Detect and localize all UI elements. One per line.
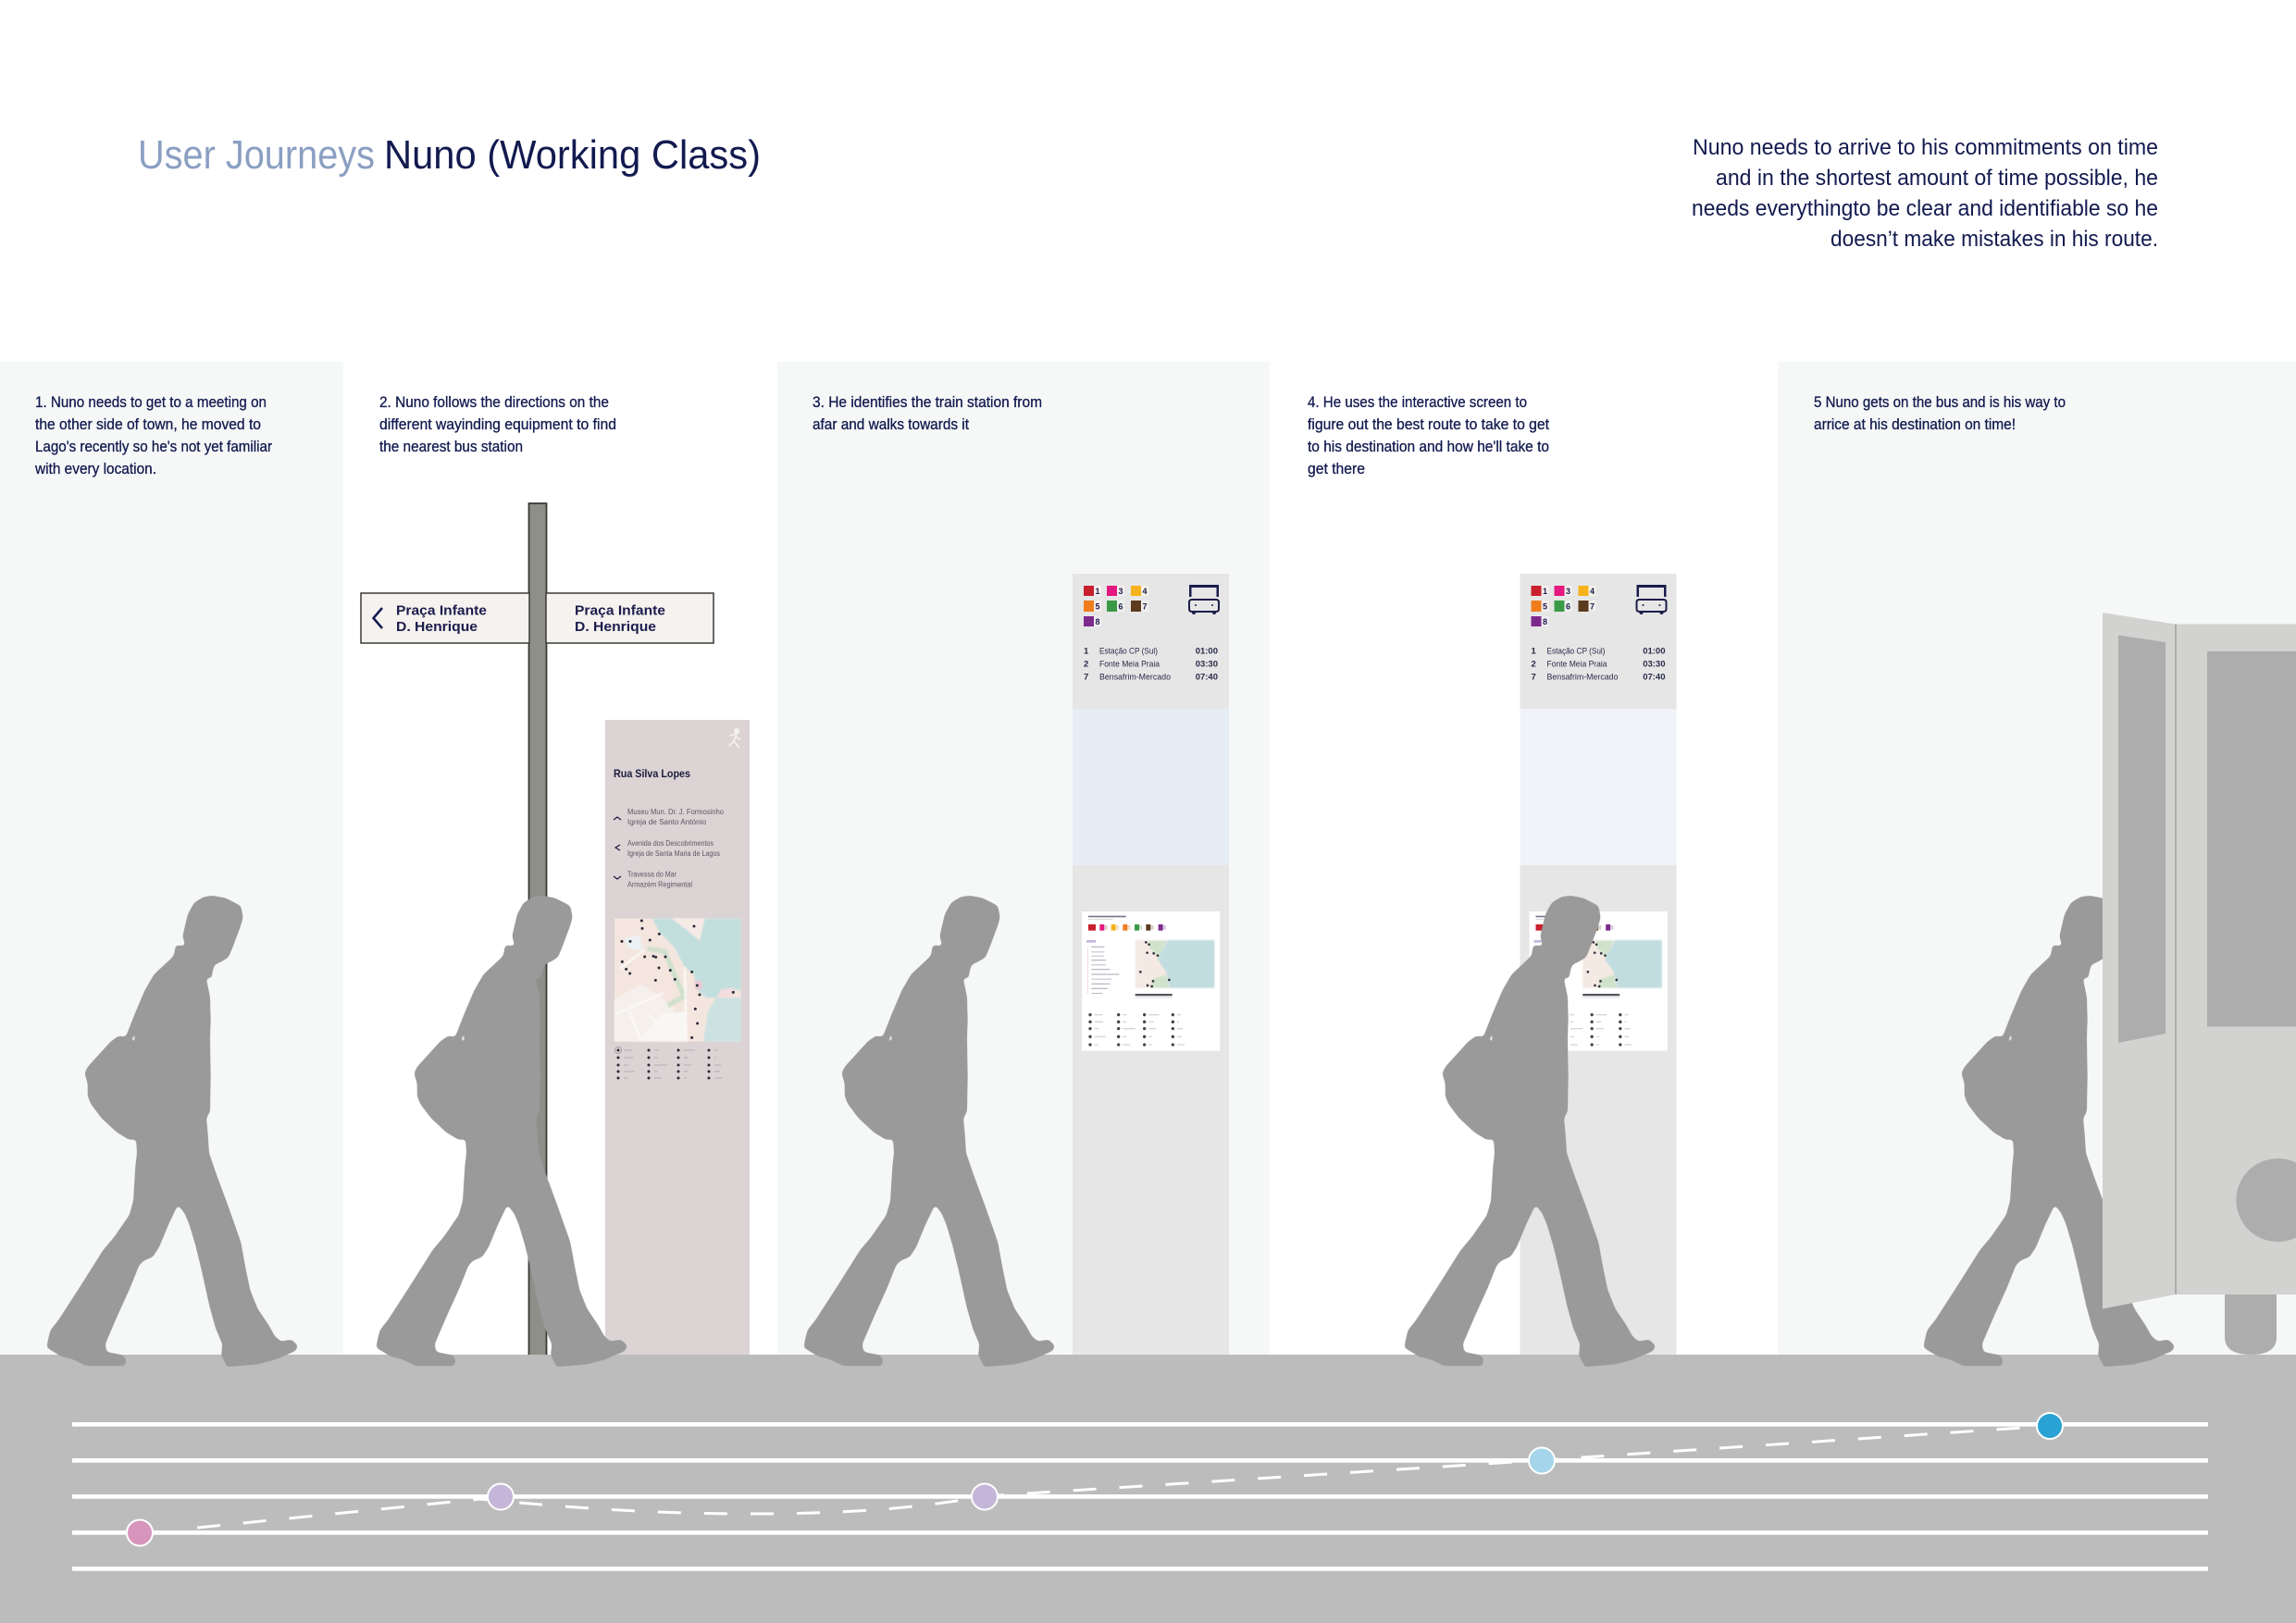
- panel: step 3 background: [777, 362, 1270, 1355]
- step 4 caption: 4. He uses the interactive screen to: [1308, 394, 1527, 411]
- train station totem (step 3): [1073, 574, 1229, 1355]
- wayfinding signpost: D. Henrique: [396, 620, 478, 635]
- line badges: 3: [1118, 587, 1123, 596]
- step 5 caption: 5 Nuno gets on the bus and is his way to: [1814, 394, 2066, 411]
- network map board: [1082, 911, 1220, 1051]
- departures list: 01:00: [1196, 646, 1218, 657]
- line badges: [1531, 586, 1595, 626]
- step 3 caption: 3. He identifies the train station from: [813, 394, 1042, 411]
- network map board: [1529, 911, 1668, 1051]
- directions list: Igreja de Santo António: [627, 818, 707, 826]
- step 4 caption: get there: [1308, 461, 1365, 477]
- journey markers: [127, 1413, 2063, 1545]
- line badges: 4: [1590, 587, 1595, 596]
- person silhouette: step 5: [1924, 896, 2175, 1367]
- departures list: Estação CP (Sul): [1547, 646, 1605, 657]
- directions list: Travessa do Mar: [627, 870, 676, 879]
- map legend: [614, 1047, 722, 1079]
- pedestrian map totem: [605, 720, 750, 1355]
- departures list: 01:00: [1643, 646, 1666, 657]
- step 1 caption: 1. Nuno needs to get to a meeting on: [35, 394, 267, 411]
- line badges: 5: [1096, 601, 1100, 611]
- step 4 caption: figure out the best route to take to get: [1308, 416, 1549, 433]
- title: [138, 132, 761, 178]
- title: User Journeys: [138, 132, 375, 178]
- bus window: [2207, 651, 2296, 1027]
- bus with open door: [2103, 613, 2296, 1355]
- departures list: 7: [1531, 672, 1536, 683]
- icon: walking person: [729, 729, 740, 747]
- step 3 caption: afar and walks towards it: [813, 416, 969, 433]
- departures list: 07:40: [1643, 672, 1666, 683]
- directions list: [614, 808, 725, 888]
- line badges: 3: [1566, 587, 1570, 596]
- departures list: 2: [1084, 659, 1088, 670]
- step 1 caption: Lago's recently so he's not yet familiar: [35, 439, 272, 455]
- person silhouette: step 3: [804, 896, 1055, 1367]
- step 4 caption: to his destination and how he'll take to: [1308, 439, 1549, 455]
- door window: [2118, 635, 2166, 1043]
- departures list: 1: [1531, 646, 1536, 657]
- departures list: [1084, 646, 1218, 683]
- departures list: 7: [1084, 672, 1088, 683]
- departures list: Fonte Meia Praia: [1099, 659, 1160, 670]
- directions list: Museu Mun. Dr. J. Formosinho: [627, 808, 725, 816]
- departures list: Fonte Meia Praia: [1547, 659, 1607, 670]
- departures list: 2: [1531, 659, 1536, 670]
- departures list: Estação CP (Sul): [1099, 646, 1158, 657]
- line badges: 5: [1543, 601, 1547, 611]
- step 1 caption: the other side of town, he moved to: [35, 416, 261, 433]
- person silhouette: step 4: [1405, 896, 1656, 1367]
- line badges: 8: [1543, 617, 1547, 626]
- street map: [614, 919, 741, 1042]
- step 2 caption: 2. Nuno follows the directions on the: [379, 394, 609, 411]
- bus body: [2177, 624, 2296, 1295]
- departures list: Bensafrim-Mercado: [1099, 672, 1171, 683]
- wayfinding signpost: D. Henrique: [575, 620, 656, 635]
- departures list: 1: [1084, 646, 1089, 657]
- wayfinding signpost: Praça Infante: [575, 603, 665, 618]
- line badges: 6: [1566, 601, 1570, 611]
- intro text block: doesn’t make mistakes in his route.: [1831, 227, 2158, 252]
- step 3 caption: [813, 394, 1042, 433]
- step 2 caption: different wayinding equipment to find: [379, 416, 616, 433]
- step 2 caption: [379, 394, 616, 455]
- line badges: [1084, 586, 1148, 626]
- icon: bus: [1636, 585, 1666, 614]
- emotional journey dashed line: [197, 1426, 2050, 1528]
- directions list: Avenida dos Descobrimentos: [627, 839, 714, 848]
- line badges: 7: [1590, 601, 1595, 611]
- icon: bus: [1189, 585, 1219, 614]
- intro text block: [1692, 135, 2158, 252]
- directions list: Igreja de Santa Maria de Lagos: [627, 849, 720, 858]
- departures list: 03:30: [1643, 659, 1666, 670]
- step 5 caption: arrice at his destination on time!: [1814, 416, 2016, 433]
- departures list: Bensafrim-Mercado: [1547, 672, 1618, 683]
- wheel arch: [2236, 1158, 2296, 1242]
- departures list: 07:40: [1196, 672, 1218, 683]
- directions list: Armazém Regimental: [627, 881, 692, 888]
- departures list: 03:30: [1196, 659, 1218, 670]
- train station totem (step 4): [1520, 574, 1677, 1355]
- journey tracks: [72, 1422, 2208, 1571]
- title: Nuno (Working Class): [384, 132, 761, 178]
- line badges: 6: [1118, 601, 1123, 611]
- line badges: 7: [1142, 601, 1148, 611]
- person silhouette: step 1: [47, 896, 298, 1367]
- intro text block: and in the shortest amount of time possible, he: [1716, 166, 2158, 191]
- step 1 caption: [34, 394, 272, 477]
- intro text block: needs everythingto be clear and identifiable so he: [1692, 196, 2158, 221]
- departures list: [1531, 646, 1666, 683]
- line badges: 1: [1543, 587, 1547, 596]
- panel: step 1 background: [0, 362, 343, 1355]
- intro text block: Nuno needs to arrive to his commitments on time: [1693, 135, 2158, 160]
- ground: [0, 1355, 2296, 1623]
- totem heading: Rua Silva Lopes: [614, 769, 690, 780]
- panel: step 5 background: [1778, 362, 2296, 1355]
- step 5 caption: [1814, 394, 2066, 433]
- wayfinding signpost: [361, 503, 714, 1356]
- line badges: 1: [1096, 587, 1100, 596]
- step 4 caption: [1308, 394, 1549, 477]
- open door: [2103, 613, 2175, 1308]
- line badges: 8: [1096, 617, 1100, 626]
- bus wheel: [2225, 1295, 2277, 1355]
- wayfinding signpost: Praça Infante: [396, 603, 487, 618]
- person silhouette: step 2: [377, 896, 627, 1367]
- step 2 caption: the nearest bus station: [379, 439, 523, 455]
- step 1 caption: with every location.: [34, 461, 156, 477]
- door divider: [2175, 624, 2177, 1295]
- line badges: 4: [1142, 587, 1148, 596]
